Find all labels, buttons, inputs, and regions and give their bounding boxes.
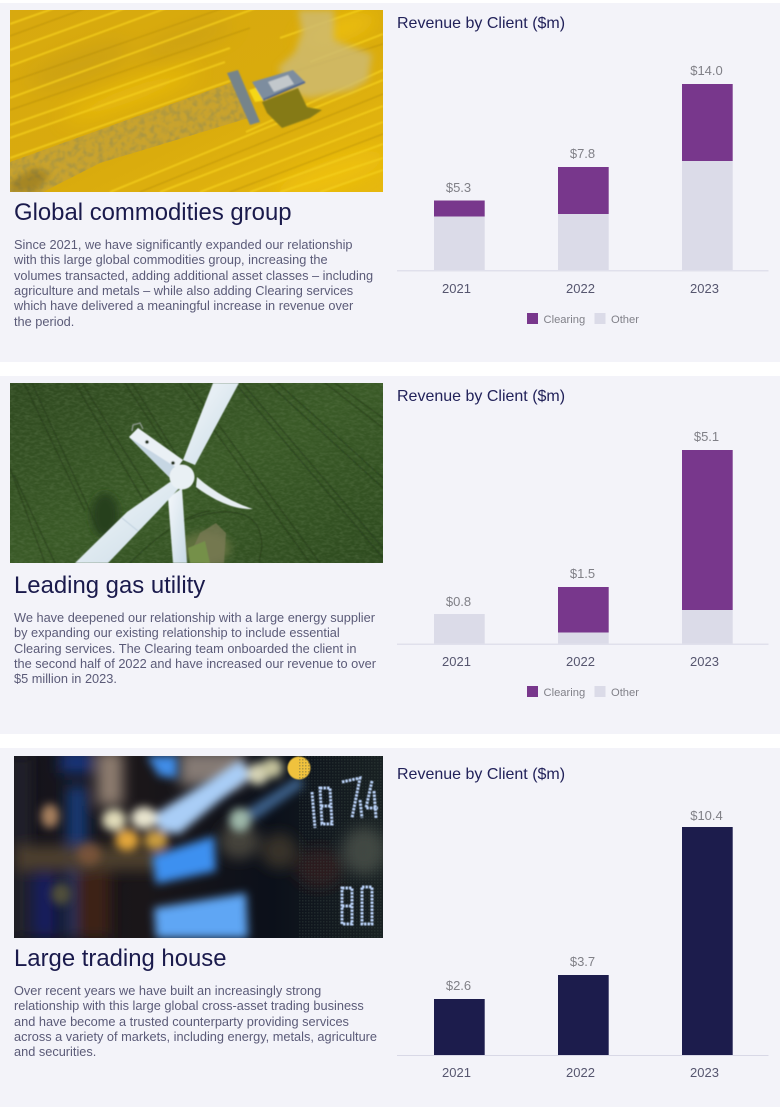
chart: revenue by client, global commodities group: $14.0 [690, 63, 723, 78]
image: blurred market ticker display [14, 756, 383, 938]
chart: revenue by client, large trading house [397, 766, 768, 1080]
header [227, 70, 260, 125]
chart: revenue by client, global commodities group: 2023 [690, 281, 719, 296]
chart: revenue by client, global commodities group [397, 15, 768, 326]
lower-left blade [75, 482, 182, 563]
text: large trading house description: and have become a trusted counterparty providing services [14, 1014, 349, 1029]
image: wind turbine over green field [10, 383, 383, 563]
chart: revenue by client, large trading house: 2021 [442, 1065, 471, 1080]
text: global commodities description: Since 2021, we have significantly expanded our relationship [14, 237, 353, 252]
chart: revenue by client, global commodities group: 2022 [566, 281, 595, 296]
nacelle [129, 428, 183, 478]
chart: revenue by client, global commodities group: Other [611, 314, 639, 326]
text: global commodities description: with this large global commodities group, increasing the [14, 252, 328, 267]
small curved blade [196, 477, 253, 509]
chart: revenue by client, large trading house: 2022 [566, 1065, 595, 1080]
text: leading gas utility description: Clearing services. The Clearing team onboarded the client in [14, 641, 356, 656]
panel: leading gas utility [0, 376, 780, 734]
chart: revenue by client, large trading house: 2023 [690, 1065, 719, 1080]
chart: revenue by client, leading gas utility: 2022 [566, 654, 595, 669]
shadow [262, 88, 322, 128]
text: global commodities description [14, 237, 373, 329]
chart: revenue by client, leading gas utility [397, 388, 768, 699]
text: large trading house description: and securities. [14, 1044, 96, 1059]
text: leading gas utility description [14, 610, 376, 686]
chart: revenue by client, global commodities group: Revenue by Client ($m) [397, 15, 565, 32]
chart: revenue by client, leading gas utility: $5.1 [694, 429, 719, 444]
hub [170, 464, 194, 490]
text: global commodities description: which have delivered a meaningful increase in revenue over [14, 298, 353, 313]
heading: global commodities group: Global commodities group [14, 199, 292, 226]
chart: revenue by client, leading gas utility: Clearing [544, 687, 585, 699]
text: leading gas utility description: the second half of 2022 and have increased our revenue to over [14, 656, 376, 671]
heading: large trading house: Large trading house [14, 945, 227, 972]
blade up [183, 383, 239, 465]
text: large trading house description [14, 983, 377, 1059]
panel: large trading house [0, 748, 780, 1107]
harvested strip [10, 82, 252, 192]
combine body [252, 70, 305, 100]
text: large trading house description: relationship with this large global cross-asset trading business [14, 998, 364, 1013]
chart: revenue by client, global commodities group: $5.3 [446, 180, 471, 195]
chart: revenue by client, global commodities group: $7.8 [570, 146, 595, 161]
tower [168, 488, 187, 563]
chart: revenue by client, global commodities group: 2021 [442, 281, 471, 296]
panel: global commodities group [0, 3, 780, 362]
chart: revenue by client, leading gas utility: $1.5 [570, 566, 595, 581]
chart: revenue by client, large trading house: $3.7 [570, 954, 595, 969]
ticker digits 8.0 [342, 887, 372, 924]
chart: revenue by client, leading gas utility: 2023 [690, 654, 719, 669]
text: large trading house description: Over recent years we have built an increasingly strong [14, 983, 321, 998]
chart: revenue by client, leading gas utility: Other [611, 687, 639, 699]
chart: revenue by client, leading gas utility: Revenue by Client ($m) [397, 388, 565, 405]
yellow cab [249, 86, 267, 102]
text: global commodities description: volumes transacted, adding additional asset classes – including [14, 268, 373, 283]
chart: revenue by client, leading gas utility: $0.8 [446, 594, 471, 609]
chart: revenue by client, leading gas utility: 2021 [442, 654, 471, 669]
text: global commodities description: agriculture and metals – while also adding Clearing services [14, 283, 353, 298]
chart: revenue by client, large trading house: Revenue by Client ($m) [397, 766, 565, 783]
text: large trading house description: across a variety of markets, including energy, metals, agriculture [14, 1029, 377, 1044]
image: combine harvester in golden field [10, 10, 383, 192]
ticker digits 18.74 [312, 788, 332, 828]
chart: revenue by client, large trading house: $10.4 [690, 808, 723, 823]
text: leading gas utility description: by expanding our existing relationship to include essential [14, 625, 340, 640]
text: leading gas utility description: We have deepened our relationship with a large energy supplier [14, 610, 375, 625]
text: leading gas utility description: $5 million in 2023. [14, 671, 117, 686]
chart: revenue by client, global commodities group: Clearing [544, 314, 585, 326]
text: global commodities description: the period. [14, 314, 74, 329]
chart: revenue by client, large trading house: $2.6 [446, 978, 471, 993]
heading: leading gas utility: Leading gas utility [14, 572, 205, 599]
